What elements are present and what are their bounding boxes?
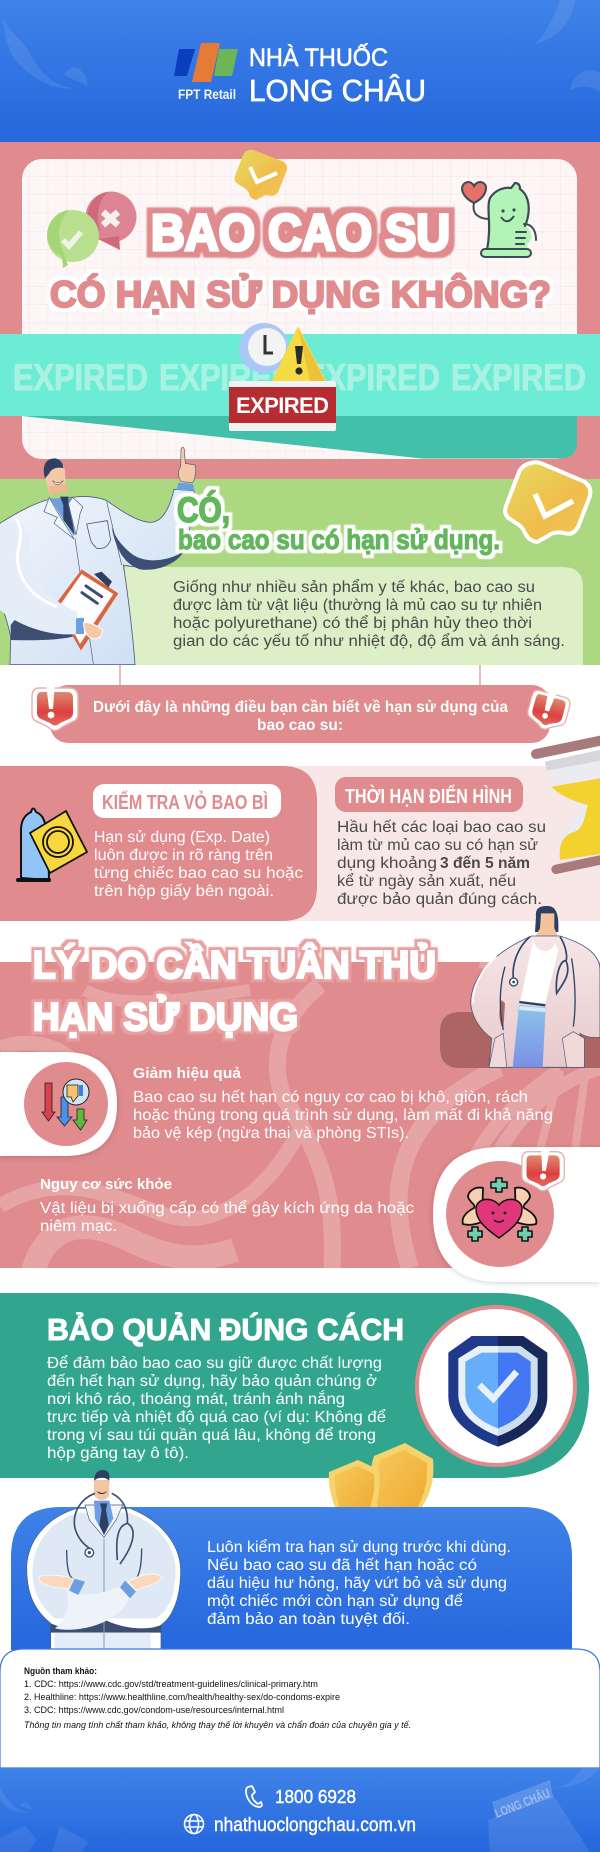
icon: shield: [448, 1336, 547, 1447]
reason 1 text: Giảm hiệu quả: [133, 1065, 242, 1082]
right column: Hầu hết các loại bao cao su: [337, 819, 546, 836]
reason 2 icon card: [433, 1147, 600, 1282]
panel: final advice: [11, 1470, 572, 1650]
panel: references: [0, 1649, 600, 1768]
right column: THỜI HẠN ĐIỂN HÌNH: [345, 784, 512, 808]
body text: Để đảm bảo bao cao su giữ được chất lượng: [47, 1355, 382, 1372]
expired sign: EXPIRED: [236, 393, 329, 418]
body text: [94, 829, 303, 900]
body text: đến hết hạn sử dụng, hãy bảo quản chúng ở: [47, 1373, 377, 1390]
teal banner: EXPIRED: [305, 357, 440, 398]
illustration: store: LONG CHÂU: [493, 1785, 552, 1821]
body text: một chiếc mới còn hạn sử dụng để: [207, 1593, 463, 1610]
icon: condom character with heart: [462, 182, 536, 257]
footer band: [0, 1768, 600, 1852]
reason 1 text: Bao cao su hết hạn có nguy cơ cao bị khô, giòn, rách: [133, 1089, 528, 1106]
reason 1 text: bảo vệ kép (ngừa thai và phòng STIs).: [133, 1125, 409, 1142]
body text: trên hộp giấy bên ngoài.: [94, 883, 274, 900]
intro pill: bao cao su:: [257, 717, 343, 734]
reason 1 icon card: [0, 1052, 117, 1156]
phone number: 1800 6928: [275, 1787, 356, 1807]
reason 2 text: niêm mạc.: [40, 1218, 117, 1235]
body text: từng chiếc bao cao su hoặc: [94, 865, 303, 882]
body text: [207, 1539, 511, 1628]
website: nhathuoclongchau.com.vn: [214, 1815, 416, 1836]
icon: yellow check: [234, 150, 287, 200]
icon: alert small: [522, 1150, 564, 1191]
title line 2: CÓ HẠN SỬ DỤNG KHÔNG?: [50, 273, 551, 315]
reason 1 text: hoặc thủng trong quá trình sử dụng, làm mất đi khả năng: [133, 1107, 553, 1124]
teal banner: EXPIRED: [159, 357, 294, 398]
panel: hero title: [0, 142, 600, 479]
header band: [0, 0, 600, 142]
body text: Luôn kiểm tra hạn sử dụng trước khi dùng.: [207, 1539, 511, 1556]
body text: dấu hiệu hư hỏng, hãy vứt bỏ và sử dụng: [207, 1575, 507, 1592]
icon: warning triangle: [273, 328, 325, 381]
panel: proper storage: [0, 1293, 589, 1515]
expired sign: [229, 381, 336, 431]
intro pill: Dưới đây là những điều bạn cần biết về hạn sử dụng của: [93, 699, 508, 716]
icon: strong heart: [463, 1178, 536, 1241]
intro pill: [32, 665, 572, 743]
body text: Nếu bao cao su đã hết hạn hoặc có: [207, 1557, 477, 1574]
right column: kể từ ngày sản xuất, nếu: [337, 873, 516, 890]
reason 2 text: Vật liệu bị xuống cấp có thể gây kích ứng da hoặc: [40, 1200, 414, 1217]
body text: trực tiếp và nhiệt độ quá cao (ví dụ: Không để: [47, 1409, 386, 1426]
dark backdrop behind doctor: [440, 1012, 600, 1068]
body text: đảm bảo an toàn tuyệt đối.: [207, 1611, 410, 1628]
body text: nơi khô ráo, thoáng mát, tránh ánh nắng: [47, 1391, 345, 1408]
body text panel: Giống như nhiều sản phẩm y tế khác, bao cao su: [173, 579, 535, 596]
heading: LÝ DO CẦN TUÂN THỦ: [33, 943, 436, 987]
panel: reasons: [0, 906, 600, 1285]
icon: gold shields: [328, 1443, 434, 1507]
heading: BẢO QUẢN ĐÚNG CÁCH: [47, 1311, 404, 1347]
panel: references: Thông tin mang tính chất tham khảo, không thay thế lời khuyên và chẩn đoán của chuyên gia y tế.: [24, 1720, 411, 1730]
icon: clock: [239, 323, 289, 373]
illustration: doctor pointing up: [0, 447, 196, 665]
subheading: bao cao su có hạn sử dụng.: [178, 524, 500, 555]
icon: hourglass: [536, 739, 600, 869]
illustration: doctor arms crossed: [27, 1470, 181, 1650]
heading: HẠN SỬ DỤNG: [33, 995, 298, 1039]
right column: [335, 777, 546, 908]
panel: references: Nguồn tham khảo:: [24, 1666, 97, 1676]
right column: được bảo quản đúng cách.: [337, 891, 542, 908]
right column: dụng khoảng: [337, 855, 437, 872]
brand name: LONG CHÂU: [249, 73, 426, 108]
shield medallion: [417, 1307, 575, 1465]
brand name: [249, 42, 426, 108]
body text panel: [125, 567, 583, 665]
left card: [0, 766, 317, 921]
icon: alert left: [32, 683, 78, 730]
body text panel: được làm từ vật liệu (thường là mủ cao su tự nhiên: [173, 597, 542, 614]
panel: packaging and shelf life: [0, 739, 600, 921]
reason 2 text: Nguy cơ sức khỏe: [40, 1176, 172, 1193]
panel: references: 3. CDC: https://www.cdc.gov/condom-use/resources/internal.html: [24, 1705, 284, 1715]
illustration: store: [488, 1780, 590, 1852]
heading pill: [93, 784, 281, 818]
icon: condom pack: [18, 808, 87, 880]
body text: Hạn sử dụng (Exp. Date): [94, 829, 270, 846]
brand name: NHÀ THUỐC: [249, 42, 388, 72]
body text panel: hoặc polyurethane) có thể bị phân hủy theo thời: [173, 615, 532, 632]
icon: large yellow check: [505, 462, 590, 542]
heading pill: KIỂM TRA VỎ BAO BÌ: [102, 790, 268, 814]
teal banner: [0, 334, 600, 458]
title line 1: BAO CAO SU: [151, 204, 450, 261]
reason 1 text: [133, 1065, 553, 1142]
right column: làm từ mủ cao su có hạn sử: [337, 837, 538, 854]
panel: references: 1. CDC: https://www.cdc.gov/std/treatment-guidelines/clinical-primary.htm: [24, 1679, 318, 1689]
icon: alert right: [524, 687, 572, 734]
panel: references: 2. Healthline: https://www.healthline.com/health/healthy-sex/do-condoms-expire: [24, 1692, 340, 1702]
panel: yes answer: [0, 447, 600, 665]
illustration: doctor with stethoscope: [471, 906, 600, 1067]
logo: FPT Retail: FPT Retail: [178, 87, 236, 102]
body text: trong ví sau túi quần quá lâu, không để trong: [47, 1427, 376, 1444]
body text: [47, 1355, 386, 1462]
body text: luôn được in rõ ràng trên: [94, 847, 273, 864]
body text: hộp găng tay ô tô).: [47, 1445, 189, 1462]
icon: arrows and thumb down: [42, 1079, 89, 1130]
icon: globe: [184, 1814, 204, 1834]
right column: 3 đến 5 năm: [440, 855, 530, 872]
icon: chat bubbles: [47, 192, 136, 268]
heading: [33, 943, 436, 1039]
body text panel: gian do các yếu tố như nhiệt độ, độ ẩm và ánh sáng.: [173, 633, 565, 650]
reason 2 text: [40, 1176, 414, 1235]
teal banner: EXPIRED: [13, 357, 148, 398]
icon: phone: [246, 1786, 262, 1807]
logo: FPT Retail: [174, 43, 238, 102]
heading: yes: CÓ,: [177, 490, 230, 530]
